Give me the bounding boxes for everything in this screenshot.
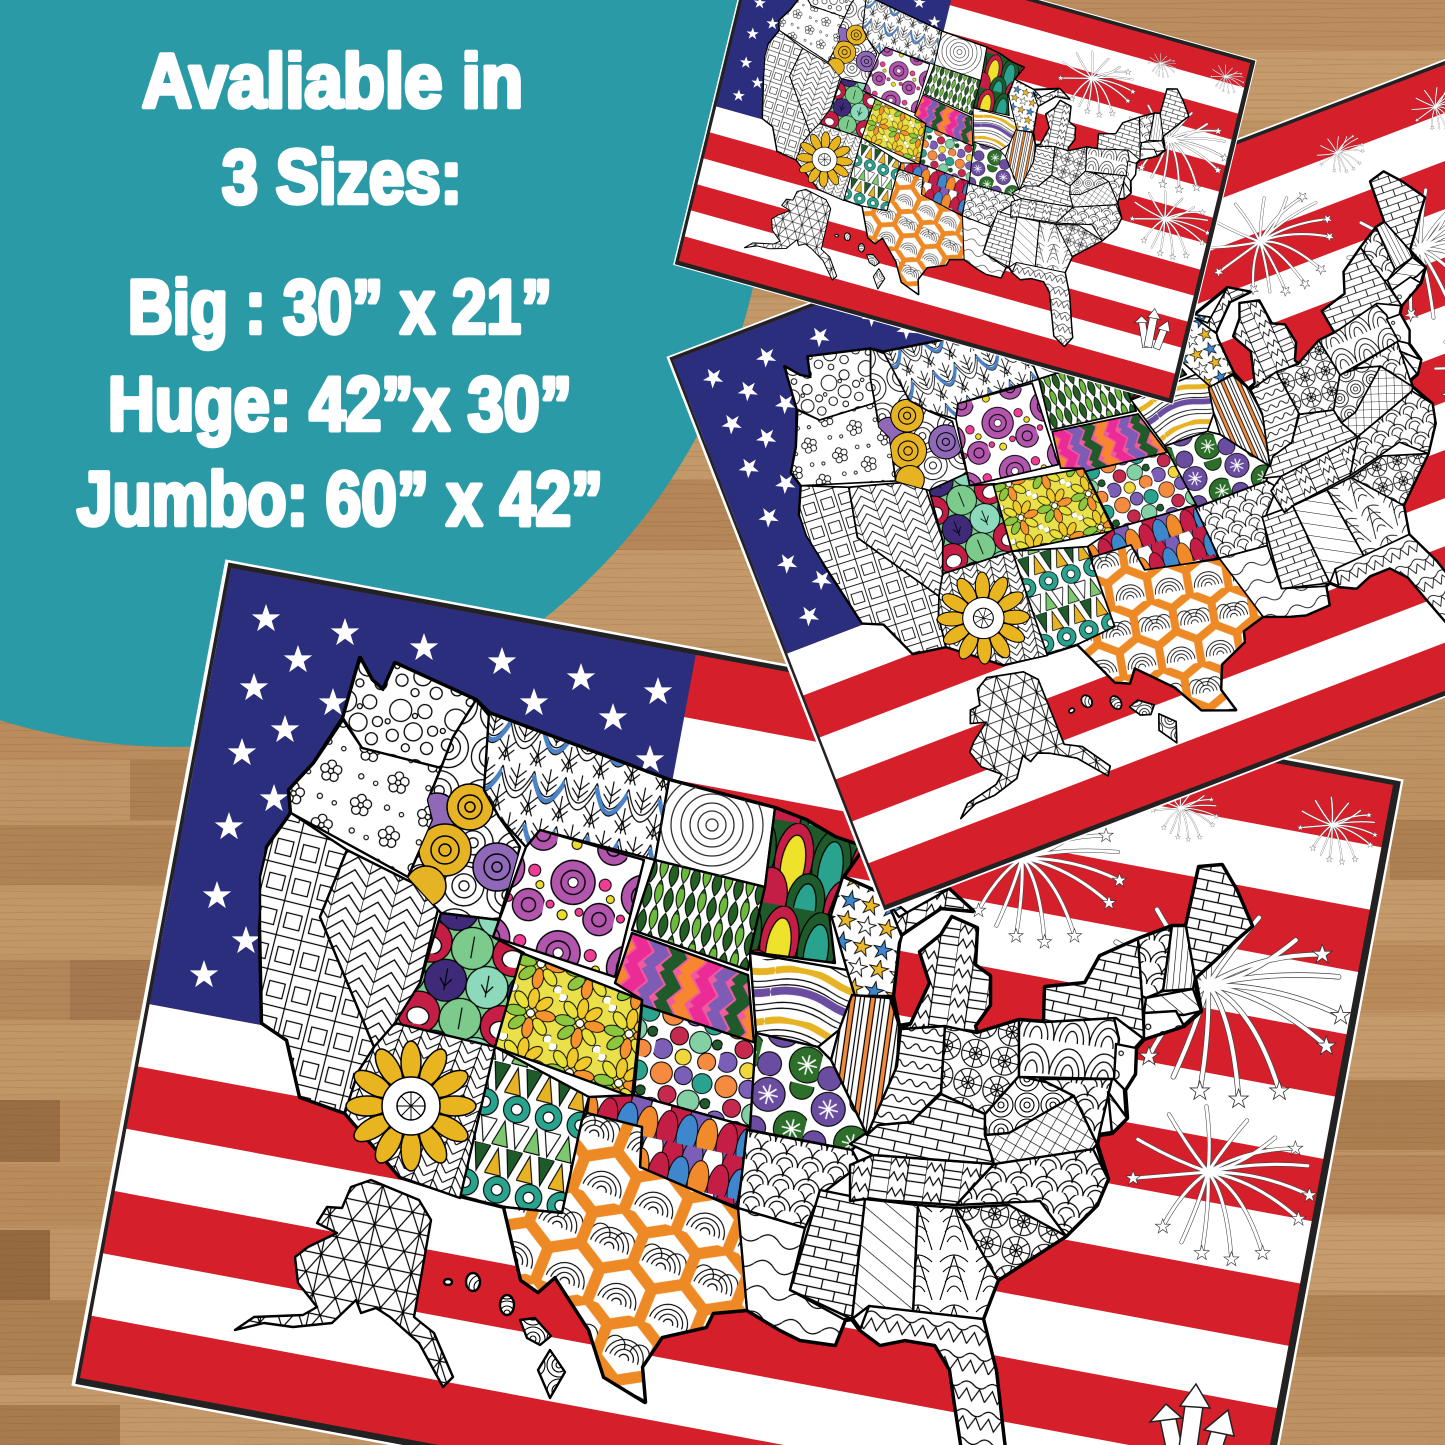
rockets xyxy=(1150,1384,1234,1445)
map of the United States xyxy=(235,658,1252,1445)
poster: medium flag map xyxy=(573,0,1445,1046)
Alaska xyxy=(235,1180,453,1387)
map outline underlay xyxy=(260,658,1252,1445)
heading: 3 sizes: 3 Sizes: xyxy=(222,135,462,220)
size: big: Big : 30” x 21” xyxy=(128,265,552,350)
poster: large flag map xyxy=(71,559,1404,1445)
small poster edge xyxy=(677,0,1252,400)
heading and size list xyxy=(77,39,603,542)
canton stars xyxy=(190,604,672,987)
Idaho swirls xyxy=(406,784,521,906)
teal circle background xyxy=(0,0,768,747)
size: huge: Huge: 42”x 30” xyxy=(108,362,572,447)
poster frame and flag background xyxy=(71,559,1404,1445)
heading: available in: Avaliable in xyxy=(142,39,523,124)
size: jumbo: Jumbo: 60” x 42” xyxy=(77,457,603,542)
fireworks xyxy=(943,784,1378,1266)
Arizona sunflower xyxy=(346,1041,476,1171)
poster: small flag map xyxy=(668,0,1261,411)
North Dakota spiral xyxy=(661,774,763,876)
